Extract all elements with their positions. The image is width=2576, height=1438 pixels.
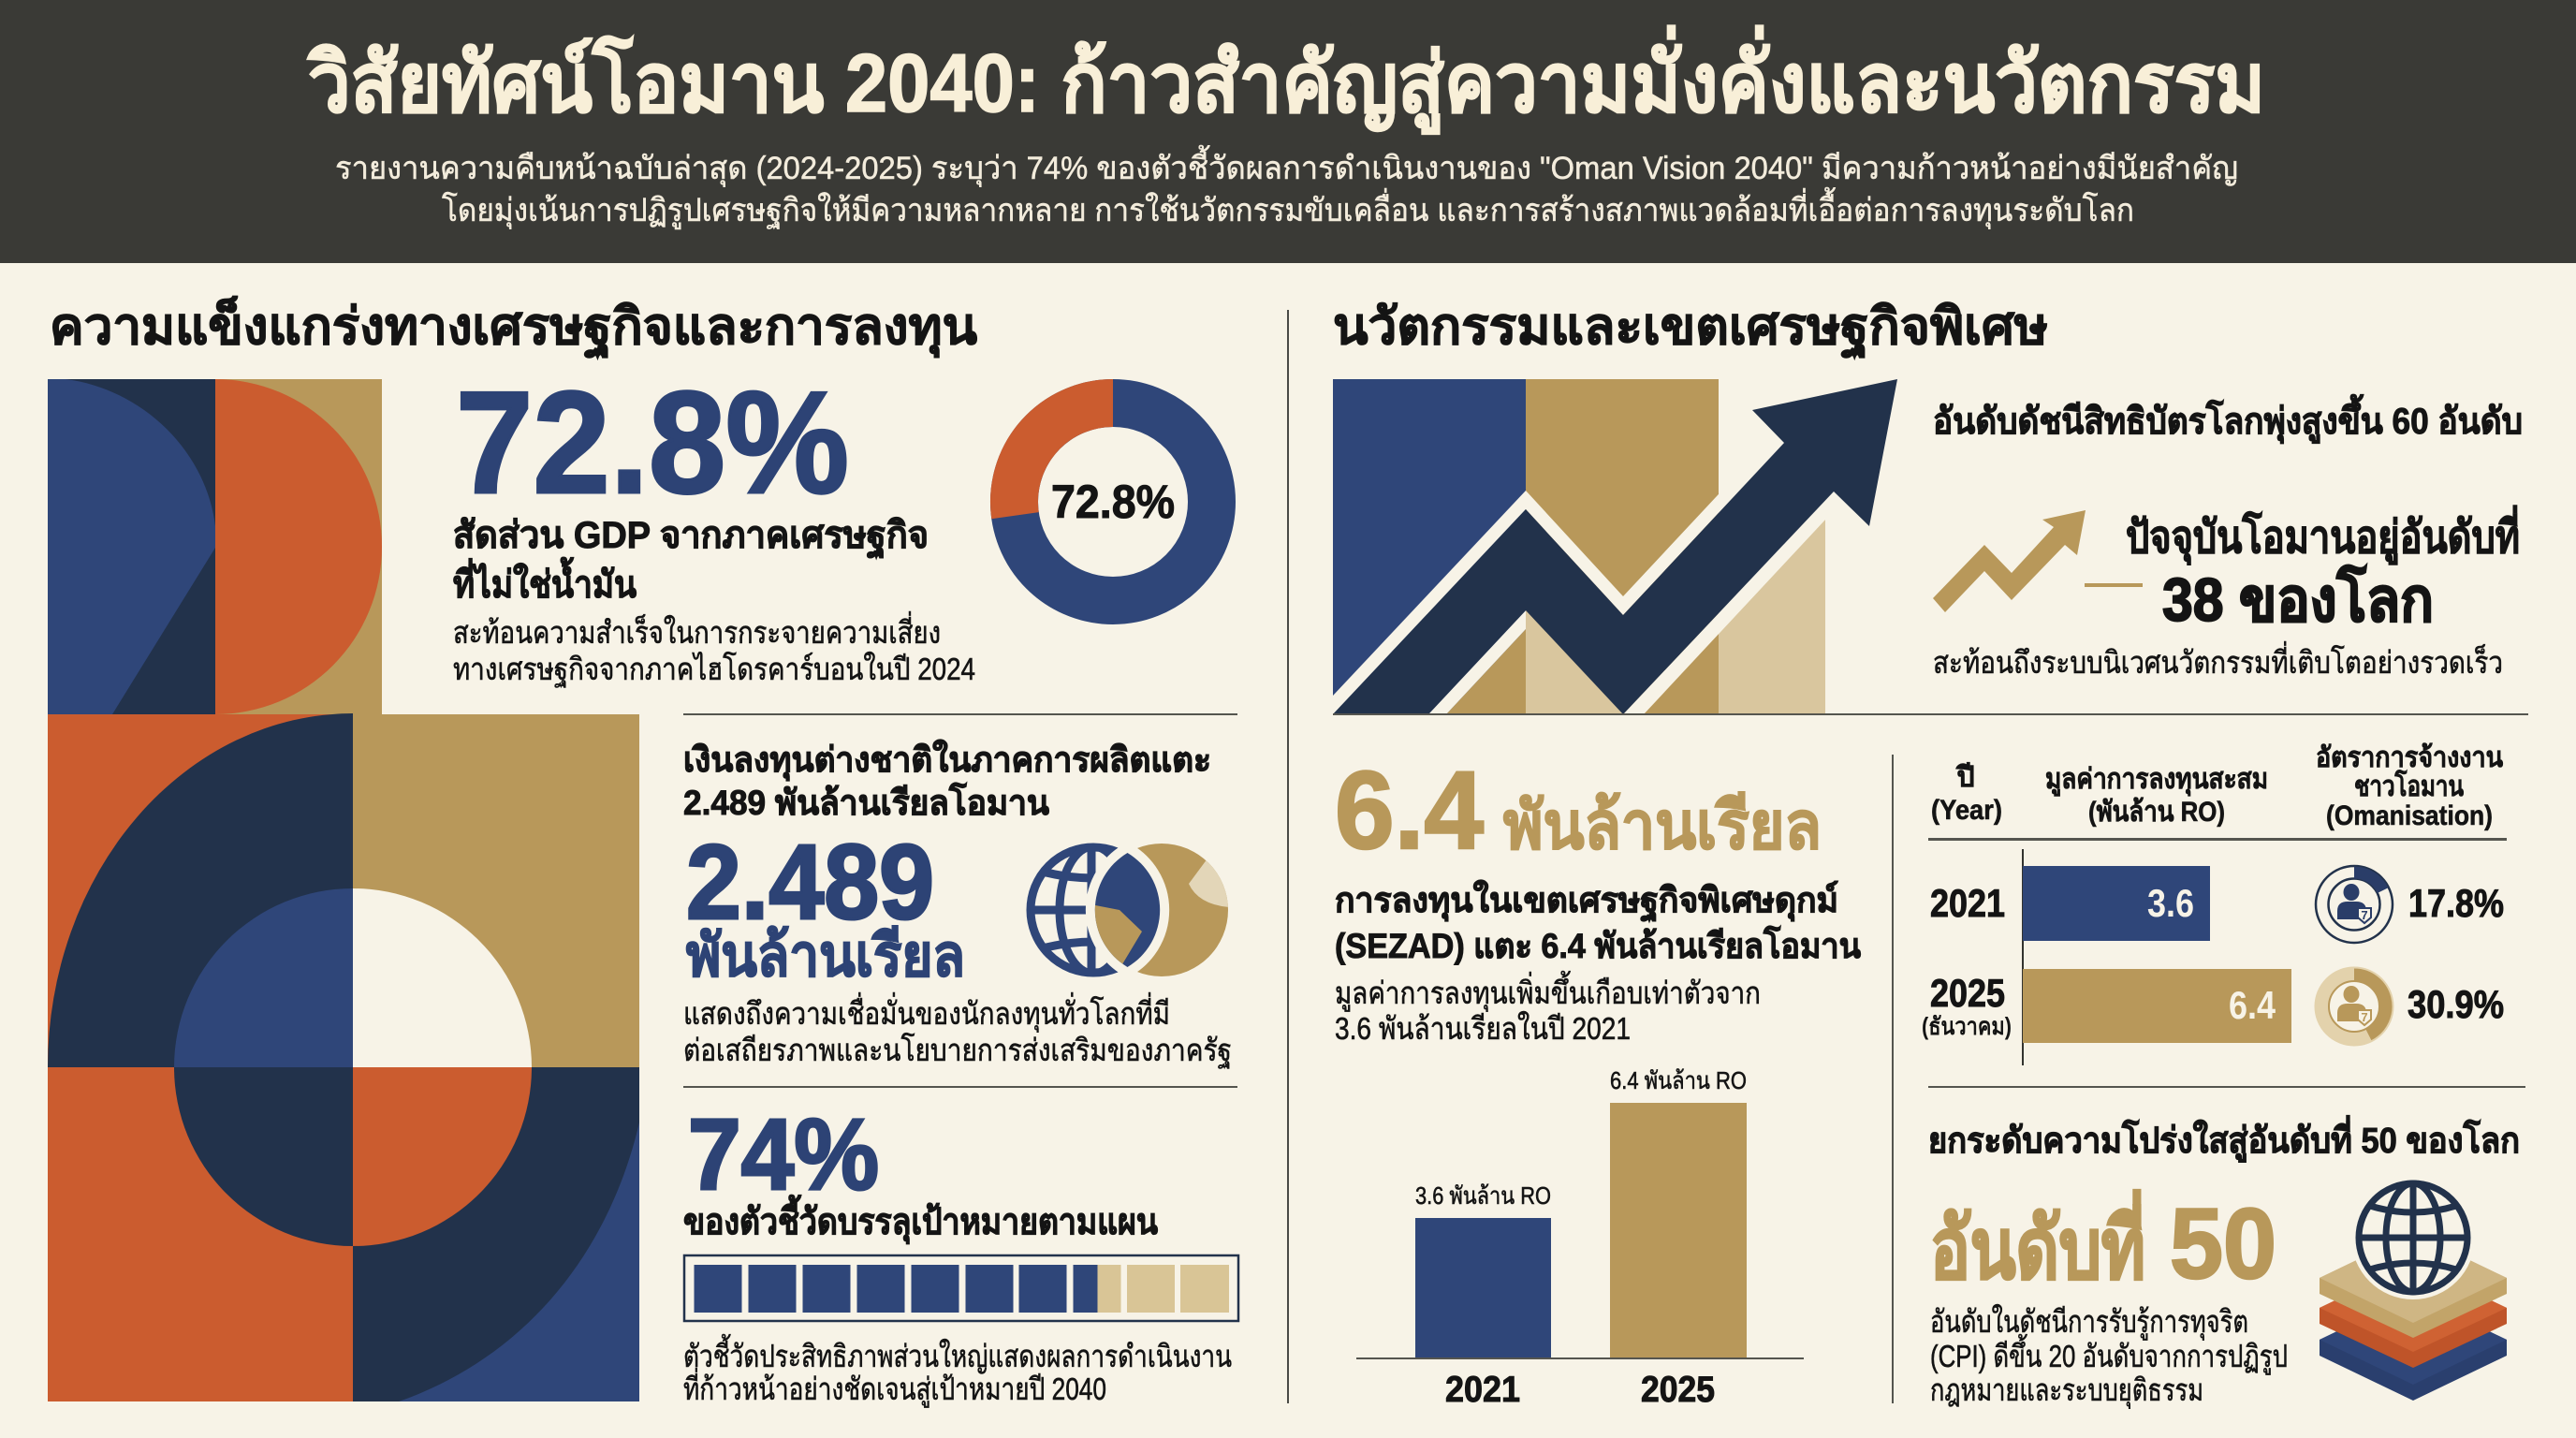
icon: globe and gold sphere [1030,844,1229,976]
table header: (Year) [1931,795,2002,826]
decorative graphic: top left geometric [48,379,382,714]
description: (CPI) ดีขึ้น 20 อันดับจากการปฏิรูป [1930,1334,2288,1375]
description: กฎหมายและระบบยุติธรรม [1930,1372,2203,1409]
patent index headline: อันดับดัชนีสิทธิบัตรโลกพุ่งสูงขึ้น 60 อันดับ [1933,394,2523,444]
stat description: ทางเศรษฐกิจจากภาคไฮโดรคาร์บอนในปี 2024 [453,652,975,688]
big number: 2.489 [686,823,934,941]
table header: อัตราการจ้างงาน [2316,742,2503,773]
big number: อันดับที่ [1930,1190,2145,1297]
column divider [1287,310,1289,1403]
table: investment and Omanisation [1922,742,2507,1065]
progress bar [684,1255,1238,1321]
description: มูลค่าการลงทุนเพิ่มขึ้นเกือบเท่าตัวจาก [1335,971,1761,1012]
stat: SEZAD 6.4 billion [1335,749,1861,1046]
table header: (พันล้าน RO) [2088,797,2225,828]
icon: small gold arrow [1933,510,2143,612]
decorative graphic: large geometric circle [48,713,639,1401]
icon: person ring 17.8 percent [2316,866,2393,943]
label: ของตัวชี้วัดบรรลุเป้าหมายตามแผน [683,1195,1158,1244]
unit: พันล้านเรียล [1503,789,1822,862]
bar chart: SEZAD investment: 2025 [1641,1370,1715,1410]
bar chart: SEZAD investment [1356,1066,1804,1410]
description: ต่อเสถียรภาพและนโยบายการส่งเสริมของภาครัฐ [683,1033,1232,1069]
rank 38 callout [2126,505,2520,634]
heading: 2.489 พันล้านเรียลโอมาน [683,782,1049,822]
donut chart 72.8 percent [1014,403,1211,601]
transparency heading: ยกระดับความโปร่งใสสู่อันดับที่ 50 ของโลก [1928,1115,2520,1163]
stat label: ที่ไม่ใช่น้ำมัน [453,557,637,606]
row 2025: 2025 [1930,971,2005,1015]
stat: foreign investment 2.489 [683,739,1232,1069]
title: วิสัยทัศน์โอมาน 2040: ก้าวสำคัญสู่ความมั่งคั่งและนวัตกรรม [307,25,2265,135]
subtitle: โดยมุ่งเน้นการปฏิรูปเศรษฐกิจให้มีความหลากหลาย การใช้นวัตกรรมขับเคลื่อน และการสร้างสภาพแวดล้อมที่เอื้อต่อการลงทุนระดับโลก [442,187,2134,229]
icon: person ring 30.9 percent: 7 [2361,1010,2368,1024]
row 2021: 2021 [1930,881,2005,925]
row 2025: 30.9% [2408,982,2504,1026]
description: ตัวชี้วัดประสิทธิภาพส่วนใหญ่แสดงผลการดำเนินงาน [683,1334,1232,1373]
big number: 72.8% [456,361,849,523]
heading: left column: ความแข็งแกร่งทางเศรษฐกิจและการลงทุน [50,297,977,360]
stat: 72.8 percent GDP [453,361,975,688]
heading: (SEZAD) แตะ 6.4 พันล้านเรียลโอมาน [1335,925,1861,965]
heading: การลงทุนในเขตเศรษฐกิจพิเศษดุกม์ [1335,879,1838,922]
table header: ชาวโอมาน [2354,769,2464,802]
icon: globe on stacked layers [2320,1176,2507,1401]
table header [1931,742,2503,831]
row 2021: 17.8% [2408,881,2504,925]
bar chart: SEZAD investment: 3.6 พันล้าน RO [1415,1181,1551,1210]
heading [683,739,1211,822]
heading: right column: นวัตกรรมและเขตเศรษฐกิจพิเศษ [1333,299,2048,360]
description [683,1334,1232,1408]
stat: CPI rank 50 [1930,1187,2288,1409]
graphic: rising arrow over bars [1333,379,1897,714]
row 2021 [1930,866,2504,943]
stat description [453,611,975,688]
heading [1335,879,1861,965]
subtitle: รายงานความคืบหน้าฉบับล่าสุด (2024-2025) ระบุว่า 74% ของตัวชี้วัดผลการดำเนินงานของ "Oman Vision 2040" มีความก้าวหน้าอย่างมีนัยสำคัญ [335,145,2238,187]
bar chart: SEZAD investment: 6.4 พันล้าน RO [1610,1066,1747,1094]
big number: 6.4 [1335,749,1484,873]
unit: พันล้านเรียล [686,924,965,989]
stat: 74 percent indicators [683,1097,1238,1408]
header banner [0,0,2576,263]
table header: (Omanisation) [2326,800,2493,831]
table header: ปี [1955,762,1975,793]
bar chart: SEZAD investment: 2021 [1445,1370,1520,1410]
description [1335,971,1761,1046]
description [1930,1304,2288,1409]
description: ที่ก้าวหน้าอย่างชัดเจนสู่เป้าหมายปี 2040 [683,1368,1106,1408]
icon: person ring 17.8 percent: 7 [2361,908,2368,922]
description: 3.6 พันล้านเรียลในปี 2021 [1335,1011,1631,1046]
row 2021: 3.6 [2147,881,2194,925]
icon: person ring 30.9 percent [2316,968,2393,1045]
big number: 74% [688,1097,879,1211]
stat label [453,515,929,606]
description: แสดงถึงความเชื่อมั่นของนักลงทุนทั่วโลกที่มี [683,992,1170,1033]
table header: มูลค่าการลงทุนสะสม [2045,764,2268,797]
donut chart 72.8 percent: 72.8% [1051,476,1175,528]
row 2025: (ธันวาคม) [1922,1012,2012,1040]
stat description: สะท้อนความสำเร็จในการกระจายความเสี่ยง [453,611,941,650]
row 2025: 6.4 [2229,983,2276,1027]
description: อันดับในดัชนีการรับรู้การทุจริต [1930,1304,2248,1341]
big number [1930,1187,2276,1299]
row 2025 [1922,968,2504,1045]
subtitle [335,145,2238,229]
rank 38 callout: 38 ของโลก [2162,564,2434,634]
big number: 50 [2170,1187,2276,1299]
stat label: สัดส่วน GDP จากภาคเศรษฐกิจ [453,515,929,560]
description [683,992,1232,1069]
heading: เงินลงทุนต่างชาติในภาคการผลิตแตะ [683,739,1211,782]
